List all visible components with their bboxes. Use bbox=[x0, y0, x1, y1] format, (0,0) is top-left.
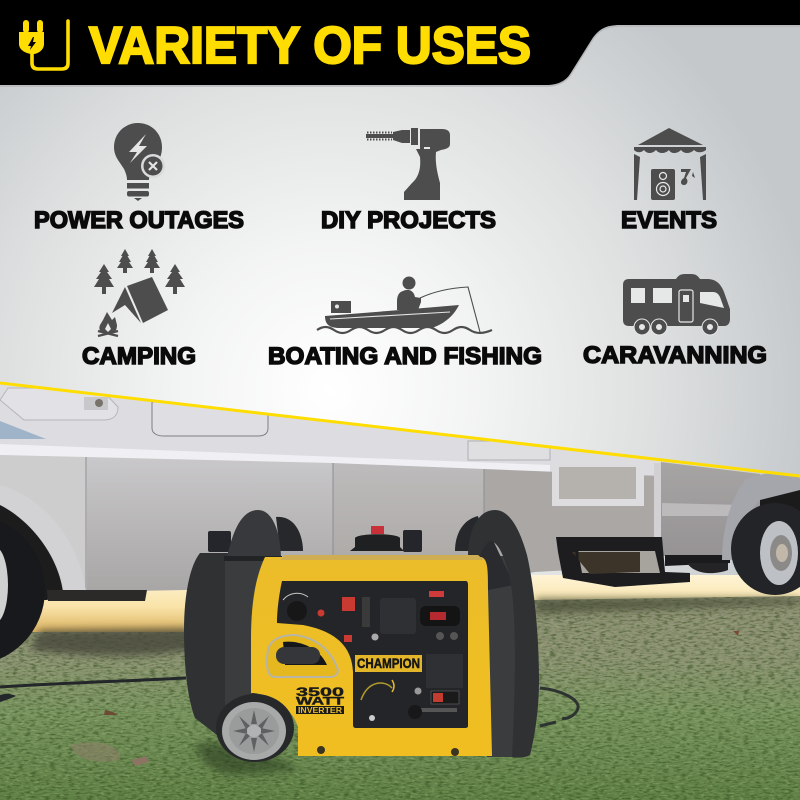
cab panels bbox=[661, 462, 760, 556]
icon: plug bbox=[19, 20, 68, 69]
header banner bbox=[0, 0, 800, 86]
icon: drill bbox=[366, 128, 450, 200]
yellow body bbox=[251, 557, 492, 756]
model text: 3500 bbox=[296, 685, 345, 699]
model text: INVERTER bbox=[298, 706, 342, 715]
wheel bbox=[216, 694, 294, 762]
carry handle bbox=[267, 635, 338, 677]
yellow divider line bbox=[0, 383, 800, 476]
icon: camping tent and trees bbox=[94, 249, 185, 336]
label: camping: CAMPING bbox=[82, 343, 196, 370]
brand logo: CHAMPION bbox=[357, 655, 420, 671]
generator bbox=[184, 510, 539, 762]
motorhome underside bbox=[47, 590, 147, 601]
fold-out steps bbox=[556, 537, 730, 587]
label: caravanning: CARAVANNING bbox=[583, 342, 767, 369]
icon: light bulb power outage bbox=[114, 123, 165, 201]
label: events: EVENTS bbox=[621, 207, 717, 234]
rear fender bbox=[86, 588, 87, 590]
grass bbox=[0, 596, 800, 800]
model text: WATT bbox=[296, 696, 344, 708]
fuel cap bbox=[350, 526, 404, 551]
control panel bbox=[277, 581, 468, 728]
icon: motorhome bbox=[623, 274, 730, 336]
icon: event tent bbox=[634, 128, 706, 200]
title: VARIETY OF USES bbox=[89, 17, 531, 75]
rear handle knobs bbox=[276, 517, 303, 551]
bright background under vehicle bbox=[0, 575, 800, 632]
label: power outages: POWER OUTAGES bbox=[34, 207, 244, 234]
motorhome body bbox=[0, 380, 760, 600]
photo: motorhome on grass bbox=[0, 380, 800, 800]
front wheel and fender bbox=[722, 473, 800, 595]
label: boating and fishing: BOATING AND FISHING bbox=[268, 343, 542, 370]
model text bbox=[296, 685, 345, 715]
label: diy projects: DIY PROJECTS bbox=[321, 207, 496, 234]
left black shell bbox=[184, 553, 262, 735]
right black shell bbox=[487, 556, 515, 757]
icon: fishing boat bbox=[317, 276, 492, 333]
rear tyre bbox=[0, 550, 44, 659]
